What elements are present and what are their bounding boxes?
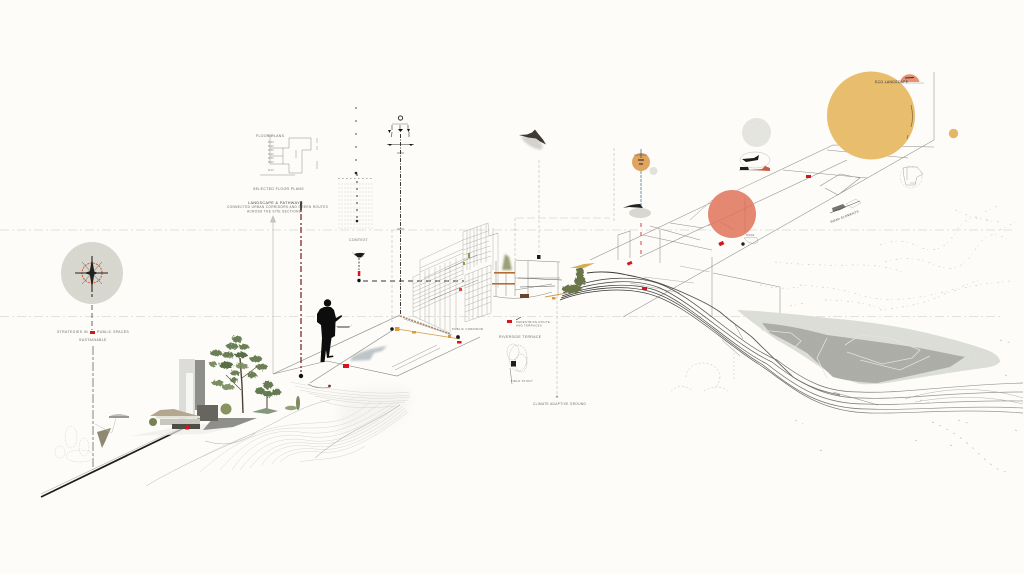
small yellow dot <box>949 129 958 138</box>
small tree and shrubs <box>252 381 300 414</box>
text block: notes <box>227 201 328 214</box>
red circle <box>708 190 756 238</box>
red marker on platform <box>343 364 349 368</box>
compass label: STRATEGIES IN <box>57 330 88 334</box>
red dashed column <box>299 201 303 378</box>
text block: notes: CONNECTED URBAN CORRIDORS AND GREEN ROUTES <box>227 205 328 209</box>
floor plan sketch: FLOOR PLANS <box>256 134 285 138</box>
dashed vertical top marker <box>355 107 357 165</box>
platform <box>273 315 480 383</box>
red dashed mast with orange circle <box>623 149 651 258</box>
soft ground wash <box>340 389 412 440</box>
tree sketch detail: FIELD STUDY <box>511 379 533 383</box>
text block: notes: ACROSS THE SITE SECTIONS <box>247 210 301 214</box>
bottom caption marker: CLIMATE ADAPTIVE GROUND <box>533 402 587 406</box>
pavilion with orange floors <box>492 254 562 298</box>
faint terrain sketch: upper right <box>760 206 1015 310</box>
dashed horizontal connector <box>363 280 464 282</box>
tree sketch detail <box>507 344 533 384</box>
small sketch under red circle <box>741 234 758 246</box>
thin vertical dashed lines <box>392 148 614 395</box>
plan caption: SELECTED FLOOR PLANS <box>253 187 304 191</box>
road deck: upper perspective lines <box>590 72 934 317</box>
small sketch under red circle: NODE <box>746 234 755 237</box>
site plan: grey landscape blob <box>737 310 1000 384</box>
text block: notes: LANDSCAPE & PATHWAYS <box>248 201 303 205</box>
compass label <box>57 330 129 342</box>
sketch node: upper road <box>739 152 770 171</box>
red circle overlay lines <box>708 197 752 232</box>
bottom caption marker <box>533 395 587 406</box>
silhouette shadow and tray <box>336 324 387 361</box>
small site marker <box>308 384 331 388</box>
tree detail caption: RIVERSIDE TERRACE <box>499 335 542 339</box>
left vertical dashed leader <box>92 305 93 470</box>
car sketch with label: ROAD ELEMENTS <box>830 209 860 224</box>
small sketch: right of road <box>900 166 923 188</box>
mountain sketch icon <box>519 130 546 150</box>
road labels: AND TERRACES <box>516 324 542 328</box>
wireframe building <box>413 223 498 333</box>
building base and orange bracing: PUBLIC CORRIDOR <box>452 327 483 331</box>
lamp post column <box>387 116 414 315</box>
grey circle <box>742 118 771 147</box>
faint trees outline <box>671 345 734 393</box>
black ground line <box>41 426 186 497</box>
faint sketch trees and lift <box>55 414 129 462</box>
road labels: PEDESTRIAN ROUTE <box>516 320 550 324</box>
small grey dot <box>650 167 658 175</box>
faint terrain speckles: lower right <box>795 340 1021 472</box>
arrow: grey upward <box>270 216 276 374</box>
large yellow circle <box>827 72 915 160</box>
large tree <box>210 336 268 413</box>
table caption: CONTEXT <box>349 238 369 242</box>
car sketch with label <box>830 199 861 224</box>
road labels <box>516 317 550 328</box>
sketch node with red link <box>352 252 365 282</box>
floor plan sketch <box>256 134 317 175</box>
tower and plaza <box>130 359 257 436</box>
circle edge sketch marks <box>907 105 912 139</box>
compass <box>61 242 123 304</box>
planting cluster <box>545 263 595 300</box>
compass label: PUBLIC SPACES <box>97 330 129 334</box>
compass label: SUSTAINABLE <box>79 338 107 342</box>
top salmon dome with label: ECO LANDSCAPE <box>875 80 909 84</box>
building base and orange bracing <box>390 253 483 344</box>
top salmon dome with label <box>875 74 924 84</box>
contour landscape <box>146 382 410 486</box>
human silhouette <box>317 299 342 362</box>
curved road bundle <box>560 272 1023 413</box>
data table <box>338 172 374 228</box>
red road markers <box>507 175 811 323</box>
